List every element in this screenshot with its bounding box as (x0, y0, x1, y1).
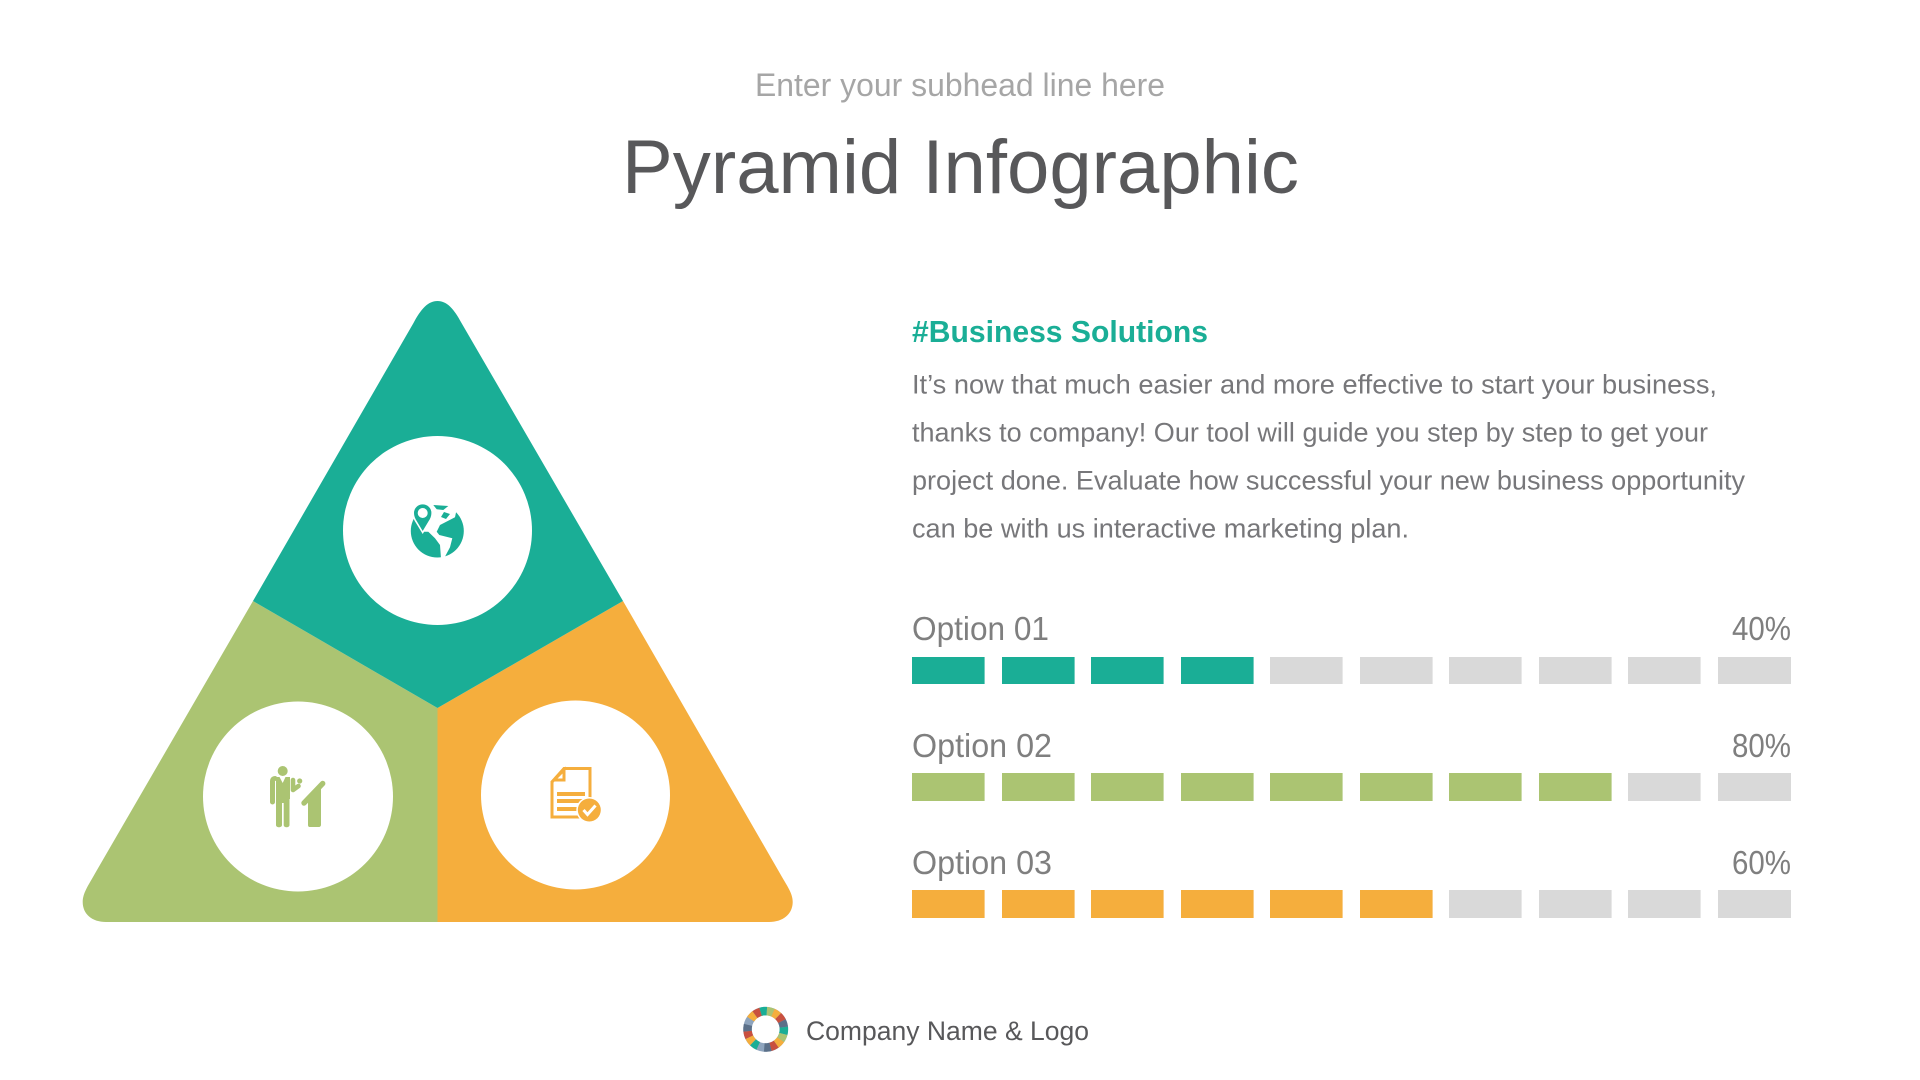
segmented bar: 60 percent (912, 890, 1791, 918)
body paragraph: It’s now that much easier and more effective to start your business, (912, 370, 1717, 400)
segment: teal top (253, 301, 623, 708)
segment: orange right (438, 601, 793, 922)
value: 80%: 80% (1732, 727, 1791, 764)
icon: speaker at lectern (272, 766, 323, 827)
label: option 03: Option 03 (912, 844, 1052, 881)
progress row: option 03 (912, 844, 1791, 918)
footer: company logo (746, 1010, 785, 1049)
label: option 01: Option 01 (912, 610, 1049, 647)
circle: left (203, 702, 393, 892)
pyramid diagram (83, 301, 793, 922)
segment: green left (83, 601, 437, 922)
body paragraph: project done. Evaluate how successful your new business opportunity (912, 466, 1745, 496)
subhead: Enter your subhead line here (755, 67, 1165, 103)
segmented bar: 80 percent (912, 773, 1791, 801)
segmented bar: 40 percent (912, 657, 1791, 684)
body paragraph (912, 370, 1745, 544)
body paragraph: can be with us interactive marketing plan. (912, 514, 1409, 544)
circle: top (343, 436, 532, 625)
body paragraph: thanks to company! Our tool will guide you step by step to get your (912, 418, 1708, 448)
icon: globe with map pin (411, 503, 464, 558)
progress row: option 01 (912, 610, 1791, 684)
value: 60%: 60% (1732, 844, 1791, 881)
footer: company name: Company Name & Logo (806, 1016, 1089, 1046)
title: Pyramid Infographic (622, 125, 1299, 210)
value: 40%: 40% (1732, 610, 1791, 647)
circle: right (481, 700, 670, 890)
icon: document with check mark (552, 768, 602, 823)
heading: business solutions: #Business Solutions (912, 314, 1208, 349)
label: option 02: Option 02 (912, 727, 1052, 764)
progress row: option 02 (912, 727, 1791, 801)
